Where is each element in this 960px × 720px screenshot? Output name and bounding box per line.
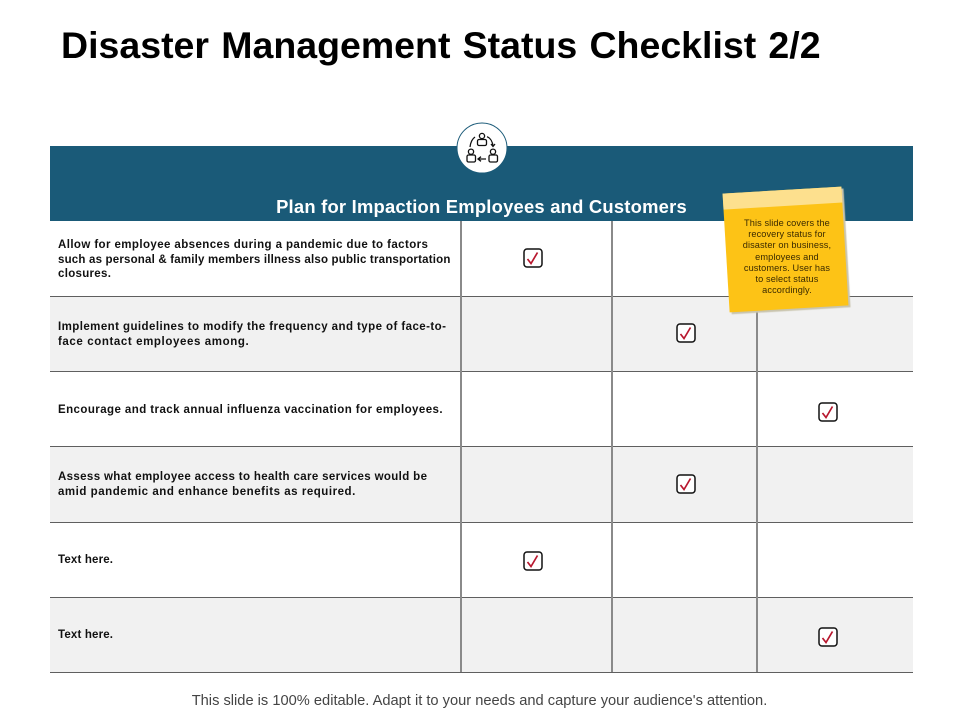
row 3 text: Encourage and track annual influenza vaccination for employees. — [58, 404, 443, 416]
sticky note text: recovery status for — [748, 229, 826, 239]
callout: sticky note — [723, 187, 848, 312]
row 1 text: closures. — [58, 268, 111, 280]
row 2 text: Implement guidelines to modify the frequency and type of face-to- — [58, 321, 446, 333]
row 5 text: Text here. — [58, 554, 113, 566]
panel: table header band — [50, 146, 913, 221]
sticky note text: This slide covers the — [744, 218, 830, 228]
sticky note text: to select status — [756, 274, 818, 284]
row 1 text: such as personal & family members illness also public transportation — [58, 254, 451, 266]
title: Disaster Management Status Checklist 2/2 — [61, 24, 821, 66]
row shading: row 6 — [50, 598, 913, 672]
sticky note text — [743, 218, 831, 295]
row 2 text — [58, 321, 446, 348]
icon: checkbox row 5 — [523, 551, 543, 571]
row 4 text: amid pandemic and enhance benefits as required. — [58, 486, 356, 498]
icon: checkbox row 6 — [818, 627, 838, 647]
row 2 text: face contact employees among. — [58, 336, 249, 348]
sticky note top strip — [723, 187, 842, 210]
row 4 text — [58, 471, 427, 498]
row shading: row 2 — [50, 297, 913, 371]
row 6 text: Text here. — [58, 628, 113, 640]
icon: checkbox row 4 — [676, 474, 696, 494]
sticky note text: employees and — [755, 252, 819, 262]
icon: checkbox row 3 — [818, 402, 838, 422]
footer text: This slide is 100% editable. Adapt it to your needs and capture your audience's attention. — [192, 693, 767, 709]
row 1 text — [58, 239, 451, 280]
sticky note text: disaster on business, — [743, 240, 831, 250]
icon: checkbox row 1 — [523, 248, 543, 268]
row 1 text: Allow for employee absences during a pandemic due to factors — [58, 239, 428, 251]
icon: checkbox row 2 — [676, 323, 696, 343]
sticky note text: customers. User has — [744, 263, 830, 273]
row shading: row 4 — [50, 447, 913, 522]
sticky note text: accordingly. — [762, 285, 812, 295]
icon: people cycle badge — [456, 122, 508, 172]
row 4 text: Assess what employee access to health care services would be — [58, 471, 427, 483]
table heading: Plan for Impaction Employees and Customers — [276, 196, 687, 217]
